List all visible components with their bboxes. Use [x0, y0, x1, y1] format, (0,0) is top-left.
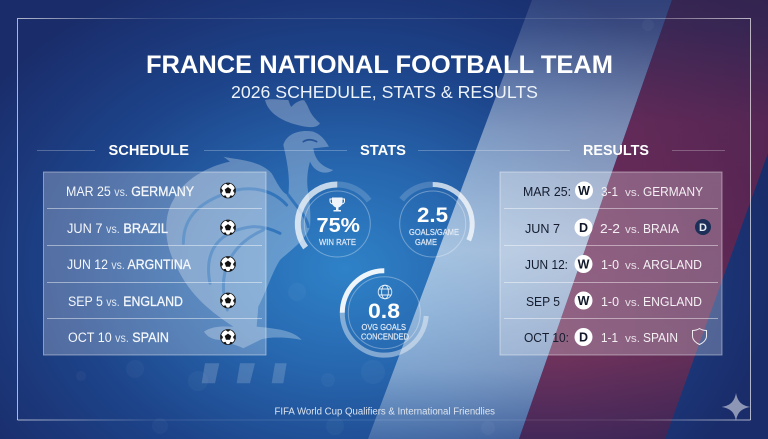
rooster watermark [166, 99, 333, 383]
stat: win rate: 75% [316, 215, 360, 237]
bottom frame line [18, 419, 750, 421]
row: Jun 12 Argntina: JUN 12 vs. ARGNTINA [67, 257, 191, 272]
row: Sep 5 England: SEP 5 vs. ENGLAND [68, 294, 183, 309]
row: Jun 7 Brazil: JUN 7 vs. BRAZIL [67, 221, 168, 236]
icon: sparkle [722, 393, 750, 421]
title: FRANCE NATIONAL FOOTBALL TEAM [146, 51, 613, 79]
row: Jun 12 win: ARGLAND [643, 257, 702, 272]
stat: goals conceded: OVG GOALS [362, 323, 406, 332]
row: Jun 12 win: W [578, 258, 590, 272]
row: Oct 10 draw: D [579, 330, 588, 344]
stat: goals conceded: CONCENDED [361, 332, 409, 342]
row: Oct 10 Spain: OCT 10 vs. SPAIN [68, 330, 169, 345]
row: Sep 5 win: ENGLAND [643, 294, 702, 309]
panel: results [274, 172, 750, 421]
row: Mar 25 win: 3-1 [601, 184, 618, 199]
heading: results: RESULTS [583, 143, 649, 159]
row: Sep 5 win [526, 292, 702, 310]
row: Mar 25 win [523, 182, 703, 200]
stat: goals conceded [342, 271, 426, 355]
row: Sep 5 win: SEP 5 [526, 294, 560, 309]
icon: trophy [330, 198, 344, 212]
row: Mar 25 win: MAR 25: [523, 184, 571, 199]
stat: win rate [298, 184, 370, 257]
row: Oct 10 Spain [68, 330, 236, 345]
row: Sep 5 win: 1-0 [601, 294, 619, 309]
stat: goals per game [400, 184, 472, 257]
row: Mar 25 win: vs. [625, 187, 640, 199]
heading: schedule: SCHEDULE [108, 143, 189, 159]
icon: shield [692, 328, 706, 344]
footer note: FIFA World Cup Qualifiers & International Friendlies [274, 406, 495, 418]
row: Mar 25 Germany: MAR 25 vs. GERMANY [66, 184, 194, 199]
row: Sep 5 win: vs. [625, 297, 640, 309]
heading: stats: STATS [360, 143, 406, 159]
row: Jun 7 draw: D [579, 221, 588, 235]
row: Jun 7 draw: BRAIA [643, 221, 679, 236]
row: Jun 12 win [525, 255, 702, 273]
row: Sep 5 England [68, 293, 236, 309]
stat: goals per game: GOALS/GAME [409, 228, 459, 237]
stat: goals conceded: 0.8 [368, 300, 400, 323]
subtitle: 2026 SCHEDULE, STATS & RESULTS [231, 82, 538, 102]
row: Oct 10 draw: 1-1 [601, 330, 618, 345]
row: Sep 5 win: W [578, 294, 590, 308]
row: Mar 25 win: W [578, 184, 590, 198]
icon: draw badge: D [699, 222, 707, 234]
panel: schedule [44, 172, 266, 355]
icon: globe ball [378, 285, 392, 299]
row: Mar 25 win: GERMANY [643, 184, 703, 199]
icon: draw badge [695, 219, 711, 235]
row: Jun 12 win: vs. [625, 260, 640, 272]
row: Oct 10 draw: OCT 10: [524, 330, 569, 345]
row: Jun 12 win: JUN 12: [525, 257, 568, 272]
row: Jun 7 draw: JUN 7 [525, 221, 560, 236]
row: Jun 7 draw [525, 218, 711, 236]
stat: goals per game: 2.5 [417, 204, 448, 227]
row: Jun 12 win: 1-0 [601, 257, 619, 272]
stat: win rate: WIN RATE [319, 238, 356, 247]
row: Oct 10 draw [524, 328, 706, 346]
row: Jun 7 Brazil [67, 220, 236, 236]
stat: goals per game: GAME [415, 238, 437, 247]
row: Jun 7 draw: 2-2 [600, 221, 620, 236]
row: Jun 7 draw: vs. [625, 224, 640, 236]
row: Oct 10 draw: vs. [625, 333, 640, 345]
row: Oct 10 draw: SPAIN [643, 330, 678, 345]
